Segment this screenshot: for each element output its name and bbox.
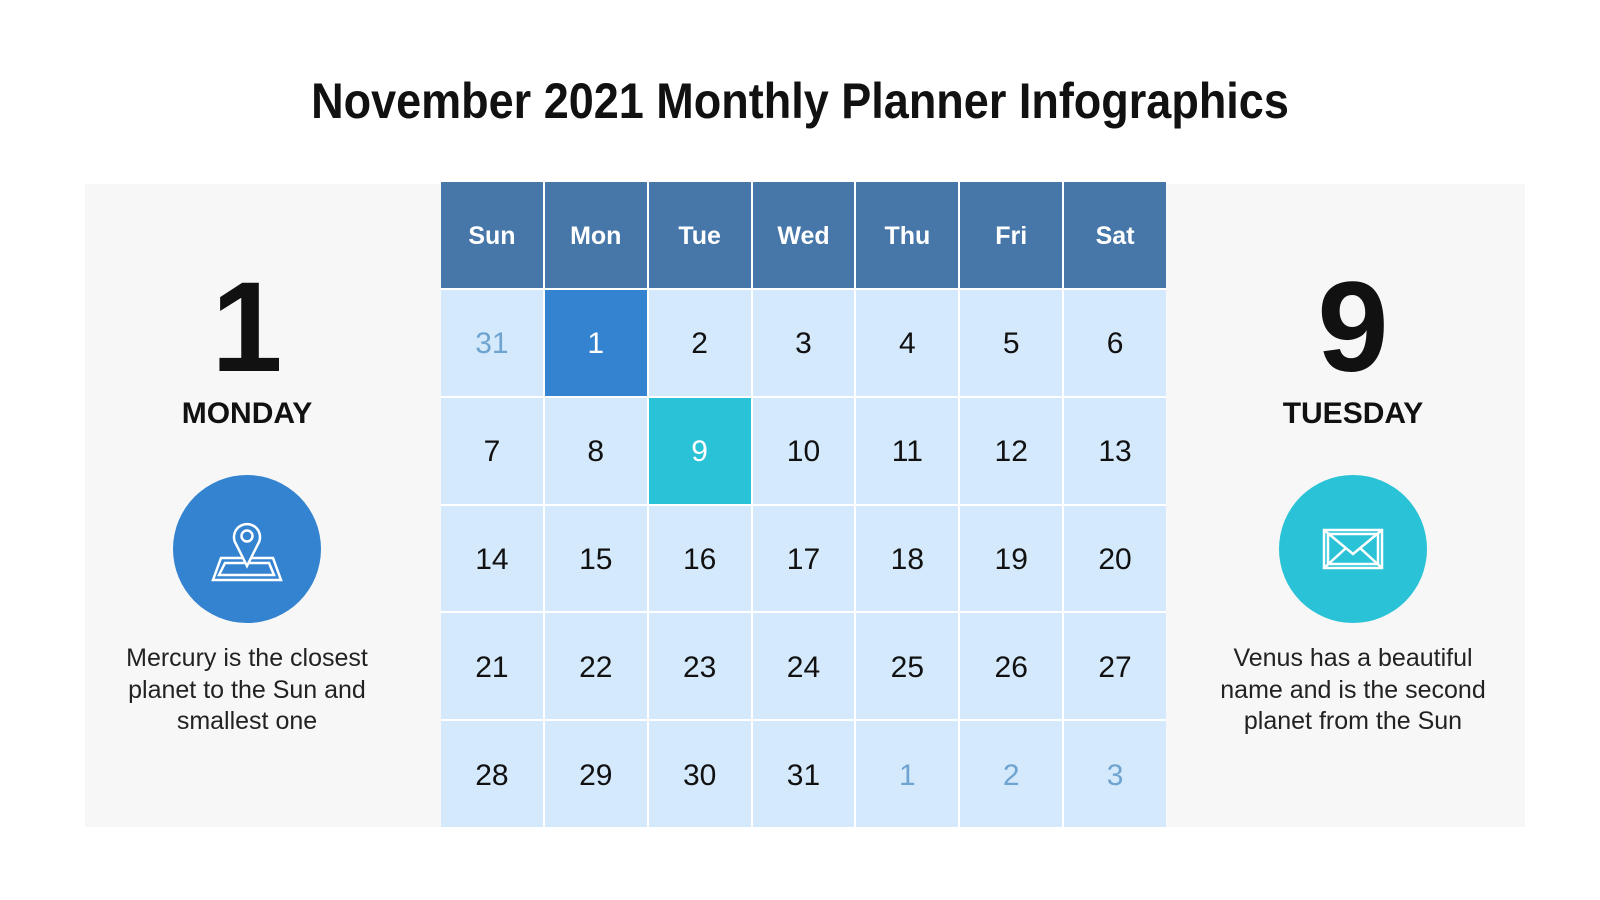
title: November 2021 Monthly Planner Infographics bbox=[311, 73, 1289, 129]
calendar: 21 bbox=[475, 651, 509, 684]
calendar: Mon bbox=[570, 222, 621, 250]
day label TUESDAY: TUESDAY bbox=[1283, 397, 1423, 430]
panel: right Tuesday bbox=[1220, 256, 1486, 735]
calendar: 22 bbox=[579, 651, 612, 684]
calendar: 6 bbox=[1107, 327, 1123, 360]
text block: name and is the second bbox=[1220, 676, 1486, 704]
calendar: 17 bbox=[787, 543, 820, 576]
icon: map pin bbox=[173, 475, 321, 623]
calendar: Wed bbox=[777, 222, 830, 250]
text block: smallest one bbox=[177, 707, 317, 735]
calendar: 10 bbox=[787, 435, 820, 468]
calendar: 5 bbox=[1003, 327, 1020, 360]
calendar: 31 bbox=[787, 759, 820, 792]
text block: Mercury is the closest bbox=[126, 644, 368, 672]
calendar: 11 bbox=[892, 435, 923, 468]
calendar: 2 bbox=[1003, 759, 1020, 792]
text block bbox=[126, 644, 368, 735]
calendar: 29 bbox=[579, 759, 612, 792]
text block: Venus has a beautiful bbox=[1233, 644, 1473, 672]
calendar: 8 bbox=[587, 435, 604, 468]
panel background bbox=[85, 184, 1525, 827]
calendar: 12 bbox=[995, 435, 1028, 468]
calendar: 3 bbox=[1107, 759, 1123, 792]
day label MONDAY: MONDAY bbox=[182, 397, 312, 430]
calendar bbox=[441, 182, 1166, 827]
calendar: Fri bbox=[995, 222, 1027, 250]
calendar: 16 bbox=[683, 543, 716, 576]
text block bbox=[1220, 644, 1486, 735]
calendar: 1 bbox=[899, 759, 916, 792]
calendar: 30 bbox=[683, 759, 716, 792]
calendar: 20 bbox=[1098, 543, 1132, 576]
calendar: 23 bbox=[683, 651, 716, 684]
calendar: 19 bbox=[995, 543, 1028, 576]
panel: left Monday bbox=[126, 256, 368, 735]
calendar: 7 bbox=[484, 435, 500, 468]
calendar: 14 bbox=[475, 543, 509, 576]
calendar: 28 bbox=[475, 759, 509, 792]
text block: planet to the Sun and bbox=[128, 676, 366, 704]
calendar: 18 bbox=[891, 543, 924, 576]
calendar: Sat bbox=[1096, 222, 1135, 250]
calendar: 15 bbox=[579, 543, 612, 576]
big number 1: 1 bbox=[211, 256, 283, 399]
calendar: Thu bbox=[884, 222, 930, 250]
calendar: 26 bbox=[995, 651, 1028, 684]
calendar: 24 bbox=[787, 651, 820, 684]
calendar: 2 bbox=[691, 327, 708, 360]
calendar: 25 bbox=[891, 651, 924, 684]
big number 9: 9 bbox=[1317, 256, 1389, 399]
calendar: 13 bbox=[1098, 435, 1132, 468]
calendar: 31 bbox=[475, 327, 509, 360]
calendar: Tue bbox=[678, 222, 721, 250]
calendar: Sun bbox=[468, 222, 516, 250]
calendar: 9 bbox=[691, 435, 708, 468]
calendar: 1 bbox=[587, 327, 604, 360]
text block: planet from the Sun bbox=[1244, 707, 1462, 735]
calendar: 3 bbox=[795, 327, 812, 360]
calendar: 27 bbox=[1098, 651, 1132, 684]
icon: envelope bbox=[1279, 475, 1427, 623]
calendar: 4 bbox=[899, 327, 916, 360]
